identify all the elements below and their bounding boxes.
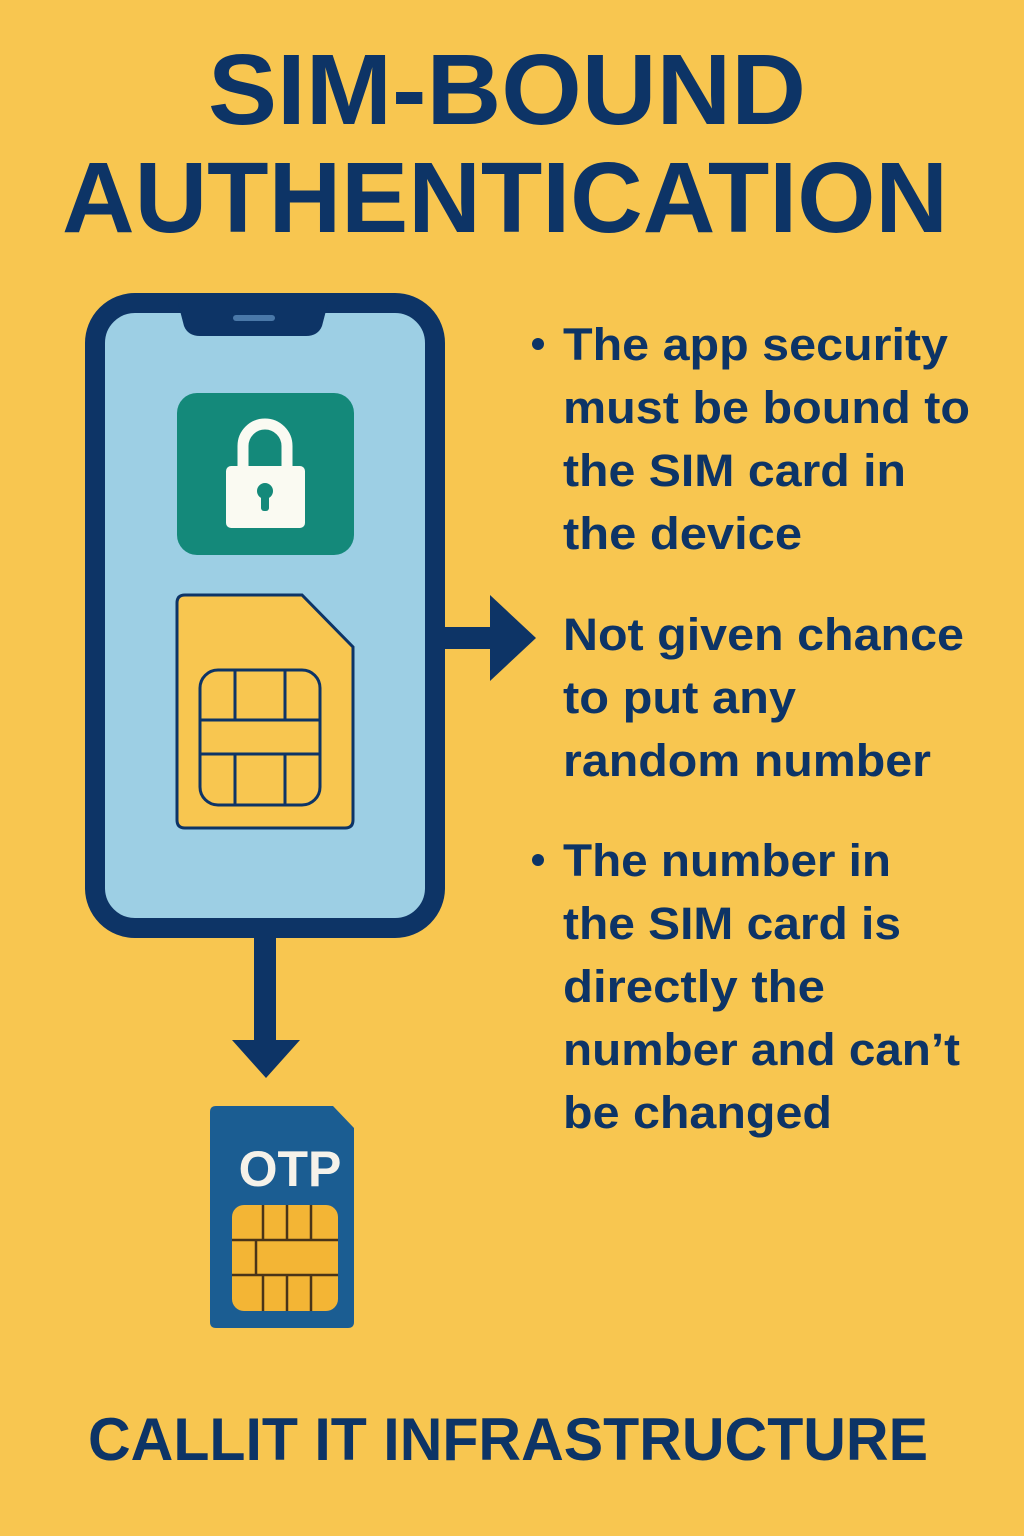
footer: CALLIT IT INFRASTRUCTURE (88, 1406, 928, 1473)
text block: bullet 3 (532, 835, 960, 1138)
text block: bullet 1: The app security (563, 319, 948, 370)
text block: bullet 1 (532, 319, 970, 559)
text block: bullet 3: directly the (563, 961, 825, 1012)
notch (178, 303, 328, 336)
text block: bullet 1: the SIM card in (563, 445, 906, 496)
title: AUTHENTICATION (62, 142, 948, 254)
text block: bullet 1: the device (563, 508, 802, 559)
icon: sim card (177, 595, 353, 828)
arrow: down (232, 930, 300, 1078)
text block: bullet 3: number and can’t (563, 1024, 960, 1075)
icon: OTP sim card (210, 1106, 354, 1328)
text block: bullet 2: random number (563, 735, 931, 786)
text block: bullet 3: be changed (563, 1087, 832, 1138)
text block: bullet 3: The number in (563, 835, 891, 886)
phone (95, 303, 435, 928)
arrow: right (440, 595, 536, 681)
text block: bullet 1: must be bound to (563, 382, 970, 433)
text block: bullet 3: the SIM card is (563, 898, 901, 949)
title: SIM-BOUND (208, 34, 806, 146)
icon: OTP sim card: OTP (239, 1141, 341, 1197)
icon: lock (177, 393, 354, 555)
title (62, 34, 948, 254)
text block: bullet 2: Not given chance (563, 609, 964, 660)
text block: bullet 2: to put any (563, 672, 796, 723)
text block: bullet 2 (563, 609, 964, 786)
